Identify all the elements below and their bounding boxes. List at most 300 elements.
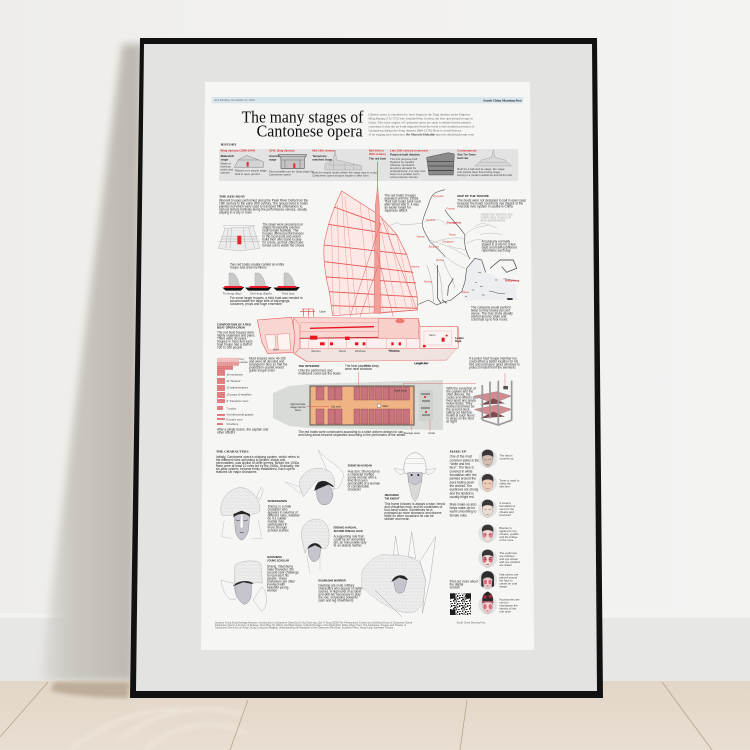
era: purpose-built theatres: theatres by wealthy	[390, 160, 415, 164]
make-up captions: The eyebrows	[499, 551, 518, 555]
make-up captions: shape	[499, 585, 507, 589]
era: makeshift stage: poles and	[221, 168, 233, 172]
xiaosheng label: characters are often	[267, 579, 295, 583]
newspaper page	[201, 82, 534, 650]
interior labels and leader lines: Approximate	[290, 402, 306, 406]
make-up captions: A creamy	[499, 501, 512, 505]
illustration: bamboo stage	[218, 226, 260, 251]
panel: header and title	[212, 97, 523, 141]
captain text: lived apart any space	[446, 398, 476, 402]
map: place names: Zhuhai	[436, 259, 444, 262]
wu sheng label: Sheng, is a male	[268, 504, 291, 508]
character: yanmei	[301, 519, 329, 573]
map note: where they troupes of	[481, 216, 511, 220]
yanmei label: girl, an honourable lady	[334, 540, 367, 544]
make-up text: and the lipstick is	[450, 491, 474, 495]
make-up captions: placed around	[499, 576, 518, 580]
era: purpose-built theatres: lower to a smaller set in	[390, 172, 420, 176]
sources footer	[215, 621, 486, 630]
xiaosheng label: Sheng, Xiaosheng	[267, 564, 293, 568]
captain text: the second deck,	[446, 407, 470, 411]
stage description: near temple festivals. The	[262, 229, 299, 233]
characters intro: features six major characters	[216, 470, 257, 474]
era: purpose-built theatres: Purpose-built theatres	[390, 153, 420, 157]
interior labels and leader lines: stage can be	[290, 405, 306, 409]
red boat intro: painted red which were used to transport the entertainers to	[219, 204, 303, 208]
panel: the red boat	[218, 194, 308, 306]
label: huadan role	[348, 465, 380, 492]
laosheng label: four-tonal voices. Sometimes he is	[384, 508, 433, 512]
make-up captions: and the bridge	[499, 535, 518, 539]
yanmei label: A supporting role that	[334, 534, 364, 538]
make-up step 1	[478, 449, 497, 468]
crew note: guide troupe order	[249, 368, 275, 372]
crew footnote	[217, 428, 268, 435]
make-up captions: skin firm	[499, 484, 510, 488]
map: place names: Sanshui	[426, 219, 435, 222]
map: place names: Taishan	[424, 280, 433, 283]
make-up captions: Blusher is	[499, 526, 512, 530]
map: place names: Macau	[462, 291, 470, 294]
red boat intro: Itinerant troupes performed along the Pearl River Delta from the	[219, 198, 308, 202]
history band	[219, 149, 518, 181]
map description: because the boats could only use stages of the	[457, 202, 523, 206]
mat board	[136, 44, 597, 691]
era: purpose-built theatres: entertainment. It is now cost-	[390, 169, 426, 173]
chart: crew legend: 10 musicians	[226, 372, 243, 376]
intro text: of its staging and characters. By Marcelo Duhalde marcelo.duhalde@scmp.com	[368, 133, 474, 137]
make-up captions: covered up	[499, 456, 514, 460]
captain text: to sleep on the floor	[446, 416, 474, 420]
make-up step 4	[478, 524, 497, 543]
red boat heading: THE RED BOAT	[219, 194, 246, 198]
boat operation text: Their last boats sank soon	[384, 199, 421, 203]
history heading: HISTORY	[221, 143, 237, 147]
characters intro: there were at least 10 roles led by the 1960s. Gradually, the	[216, 464, 300, 468]
stage description: for a time, as their cities have	[262, 241, 304, 245]
era: purpose-built theatres: Chinese merchants	[390, 163, 415, 167]
company text: A company normally	[482, 239, 510, 243]
QR code	[450, 593, 471, 615]
boat operation text: operated until the 1950s.	[384, 196, 419, 200]
stage description: troupes offered performances	[262, 232, 304, 236]
wu sheng label: more stronger	[268, 525, 287, 529]
bunk text: If a junior 'bad' troupe member too	[469, 356, 517, 360]
interior heading and text: Only the performers and	[298, 368, 333, 372]
make-up captions	[499, 453, 521, 614]
composition heading: BOAT OPERA CREW	[217, 325, 245, 329]
captain text: at night	[446, 419, 457, 423]
mast and rigging	[350, 186, 418, 317]
make-up text: face". The face is	[450, 466, 474, 470]
floor plan	[310, 386, 414, 425]
make-up captions: emphasise the	[499, 604, 518, 608]
wusheng martial label: scenes. A high level of acrobat	[318, 590, 361, 594]
make-up captions: forehead	[499, 513, 511, 517]
wusheng martial label: and skill are necessary to play	[318, 593, 361, 597]
bunk text: could afford a better location for his	[469, 359, 519, 363]
crew note	[249, 356, 288, 372]
intro text: Guangdong during the Song dynasty (960-1279). Here is a brief history	[368, 128, 462, 132]
character: hua dan	[285, 450, 343, 505]
make-up captions: and eye shadow	[499, 560, 521, 564]
xiaosheng label: second-rank challenge	[267, 570, 299, 574]
laosheng label	[384, 494, 446, 521]
laosheng label: sinister and mean	[384, 517, 409, 521]
text: company performance: The company would perform	[471, 305, 511, 309]
digital version note: the digital	[450, 582, 463, 586]
era: the red boat: 20th century	[369, 152, 386, 156]
boat: first: Tin Hong (Sky)	[223, 291, 241, 295]
characters intro: six-pillar system, became firmly established. Each opera	[216, 467, 295, 471]
bunk text: protect himself from the elements	[469, 365, 516, 369]
sources footer: Sources: Hong Kong Heritage Museum; Introduction to Cantonese Opera by Dr. Ng Chun-yau; Qiu Yi-Tong (2009) The Performance Context as a Defining Force of Cantonese Opera	[215, 621, 413, 624]
boat operation text: The red boats' troupes	[384, 193, 416, 197]
text: company performance: twice to nine shows per port	[471, 309, 510, 313]
make-up heading: MAKE-UP	[450, 449, 467, 453]
boat operation text: after World War II. It was	[384, 202, 419, 206]
make-up captions: are redrawn	[499, 554, 515, 558]
character: bearded laosheng	[394, 453, 436, 502]
xiaosheng label: XIAOSHENG	[267, 556, 282, 559]
wusheng martial label: the role, employing powerful	[318, 596, 358, 600]
laosheng label: JINGSHENG	[384, 494, 399, 497]
map note: their performance	[481, 219, 506, 223]
captain text: chief director, the	[446, 392, 471, 396]
sources footer: South China Morning Post	[457, 621, 486, 624]
interior heading and text	[298, 364, 379, 387]
interior heading and text: musicians could use the boats	[298, 371, 341, 375]
text: company performance	[471, 305, 513, 322]
illustration: bunk beds	[474, 381, 512, 425]
bunk text	[469, 356, 520, 369]
map: place names: Foshan	[447, 207, 456, 210]
make-up text: female roles	[450, 513, 467, 517]
chart: crew dot grid	[217, 358, 239, 425]
map: place names: Guangzhou	[447, 221, 462, 225]
map description: The boats were not designed to sail in open seas	[457, 199, 526, 203]
map: place names: Nanhai	[417, 235, 425, 238]
hull	[293, 318, 459, 362]
map note	[481, 213, 513, 223]
make-up step 5	[478, 549, 497, 568]
chart: crew legend: 3 barbers	[226, 422, 239, 426]
map: place names	[411, 195, 520, 300]
map note: Hangzhou was the site	[481, 213, 513, 217]
boat labels: Room	[339, 349, 347, 353]
map: place names: Panyu	[449, 233, 457, 236]
captain text: the captain and the	[446, 389, 473, 393]
make-up captions: Toner is used to	[499, 478, 520, 482]
stage description: build their own stand to play	[262, 238, 302, 242]
xiaosheng label: beautiful young	[267, 585, 289, 589]
make-up text: One of the most	[450, 455, 472, 459]
company text: days and having different	[482, 245, 517, 249]
red beams and cargo	[300, 327, 448, 347]
xiaosheng label: to represent his	[267, 573, 289, 577]
panel: composition of a red boat crew	[217, 323, 288, 435]
interior right labels: Bunk beds	[394, 389, 408, 393]
make-up text: foundation with red	[450, 473, 477, 477]
yanmei label	[334, 527, 367, 547]
captain text: bunks at each floors	[446, 413, 475, 417]
masthead bar: A12 Monday, November 11, 2019	[214, 98, 255, 103]
red boat intro: various temple festivals along the performance venues, usually	[219, 207, 307, 211]
cook area	[419, 390, 433, 421]
third boat text: For some larger troupes, a third boat was needed to	[230, 296, 303, 300]
intro text: Chinese opera is considered to have begun in the Tang dynasty under Emperor	[368, 112, 471, 116]
era: ancestral stage: Ancestral	[269, 154, 282, 158]
chart: crew legend	[226, 357, 254, 426]
label: huadan role: Hua dan: Sheng dan is	[348, 470, 380, 474]
era: makeshift stage: Ming dynasty (1368-1644)	[221, 149, 255, 153]
red boat intro: staying in a city or town	[219, 210, 252, 214]
wusheng martial label: DAOMADAN WARRIOR	[318, 579, 346, 582]
chart: crew legend: 22 "flowers"	[226, 379, 241, 383]
boat labels	[273, 309, 436, 366]
wu sheng label: martial man,	[268, 519, 285, 523]
era: matshed stage: Built for temple rituals where the stage was in a city,	[312, 170, 377, 174]
wusheng martial label: characters who appear in battle	[318, 587, 363, 591]
era: sha tin town hall: facing in a modern audience and all the hall	[457, 173, 512, 177]
interior heading and text: were near windows	[345, 367, 372, 371]
laosheng label: and chivalrous man, and its constitutes of	[384, 505, 442, 509]
era: sha tin town hall: and stands have fixed rising stage	[457, 170, 500, 174]
interior labels and leader lines: Cat men	[331, 404, 342, 408]
era: sha tin town hall: Sha Tin Town	[457, 153, 476, 157]
baseboard	[0, 613, 750, 681]
boat labels: Length line	[414, 362, 428, 366]
crew note: production quartet would	[249, 365, 284, 369]
map description: riverside river system in southern China	[457, 205, 513, 209]
panel: the interior	[273, 336, 520, 437]
yanmei label: ERBANG HUADAN,	[334, 527, 357, 530]
stage description: turned out to watch the shows	[262, 244, 305, 248]
laosheng label: portrayed as more shamanic and sincere	[384, 511, 442, 515]
crew note: and were all devoted and	[249, 359, 285, 363]
make-up step 2	[478, 473, 497, 492]
captain text: below decks. They	[446, 401, 473, 405]
era: makeshift stage	[221, 149, 267, 176]
make-up captions: The hair is	[499, 453, 513, 457]
make-up captions: of the nose	[499, 538, 514, 542]
sources footer: Cantonese Opera: A Century of Change, Choi Ming-Yip (2014), Red Boat Opera: Cultural Heritage of the Pearl River Delta, Wong Yuen, The Cantonese Troupes and Theatre of	[215, 624, 406, 627]
stage description	[262, 223, 305, 248]
two boats text	[230, 262, 284, 269]
bunks	[316, 387, 410, 424]
xiaosheng label: women	[267, 588, 277, 592]
composition text: boat troupe had a staff of	[217, 343, 252, 347]
make-up captions: make the	[499, 481, 511, 485]
wusheng martial label	[318, 579, 363, 603]
xiaosheng label: involved with	[267, 582, 285, 586]
interior labels and leader lines	[290, 402, 406, 437]
boat labels: Women	[311, 349, 321, 353]
cabin and deckhouses	[300, 309, 458, 348]
make-up text: the cheeks. The	[450, 484, 472, 488]
label: huadan role: of considerable	[348, 485, 369, 489]
era: purpose-built theatres: around a demand for	[390, 166, 416, 170]
make-up text: usually bright red	[450, 495, 474, 499]
wu sheng label: WUSHENG/MAN	[268, 500, 287, 503]
era: makeshift stage: Makeshift	[221, 154, 234, 158]
crew note: arranged in tiers so that the	[249, 362, 288, 366]
crew footnote: After a single dozen, the captain and	[217, 428, 268, 432]
map: coastline and islands	[418, 258, 517, 305]
composition heading	[217, 323, 251, 329]
composition heading: COMPOSITION OF A RED	[217, 323, 251, 327]
characters intro: the different roles according to gender, status and	[216, 458, 285, 462]
make-up captions: Accessories are	[499, 598, 520, 602]
xiaosheng label: male character, the	[267, 567, 294, 571]
label: huadan role: a character trained	[348, 473, 374, 477]
interior labels and leader lines: and living areas became separated according to the performers of the artists.	[298, 433, 406, 437]
interior labels and leader lines: fixed	[295, 408, 301, 412]
boat labels: Windows	[389, 349, 401, 353]
era: matshed stage: Temporary	[312, 154, 327, 158]
map: place names: Jiangmen	[428, 245, 440, 248]
character: wu sheng	[221, 487, 263, 540]
bunk text: bed and enclosure gives windows to	[469, 362, 520, 366]
interior right labels: Windows	[388, 349, 400, 353]
era: ancestral stage: 1640, Qing dynasty	[269, 149, 295, 153]
third boat text: costumes, props and huge ensemble	[230, 302, 282, 306]
panel: history timeline	[219, 143, 518, 192]
title: The many stages of	[242, 108, 364, 127]
laosheng label: THE KNIGHT	[384, 497, 400, 500]
wusheng martial label: sash and leg movements	[318, 599, 354, 603]
wu sheng label: different roles, whether	[268, 513, 300, 517]
boat operation text: an easier target for	[384, 205, 411, 209]
red boat intro: 19th century to the early 20th century. The groups lived in boats	[219, 201, 308, 205]
era: matshed stage: Mid-19th century	[312, 149, 335, 153]
intro text: Ming Huang (712-755) who founded Pear Garden, the first operational troupe in	[368, 116, 473, 121]
interior right labels: Storage area	[403, 431, 420, 435]
boat labels: Bow	[273, 348, 279, 352]
picture frame	[130, 38, 603, 698]
label: huadan role: character	[348, 488, 361, 492]
boat: third: Third boat	[282, 291, 295, 295]
map: place names: Qingyuan	[433, 195, 445, 198]
composition text: troupes in most and each	[217, 340, 253, 344]
make-up text: painted around the	[450, 477, 476, 481]
era: sha tin town hall: Hall site	[457, 156, 469, 160]
boat labels: Stern	[429, 333, 436, 337]
make-up captions: cheeks, eyelids	[499, 532, 519, 536]
stage description: stages temporarily erected	[262, 226, 300, 230]
wusheng martial label: Daofang are male military	[318, 584, 355, 588]
laosheng label: while on other occasions he can be	[384, 514, 434, 518]
make-up captions: used on the	[499, 507, 515, 511]
era: makeshift stage: built in open ground	[235, 172, 260, 176]
era: purpose-built theatres	[390, 149, 454, 179]
interior heading and text: The best places to sleep	[345, 364, 379, 368]
chart: crew legend: 13 administrators	[226, 386, 249, 390]
make-up captions: cheeks and	[499, 510, 514, 514]
wu sheng label	[268, 500, 300, 532]
sources footer: Cantonese Opera by Lai-Tung Chung; Living and Staging; Understanding the Hardware of the Cantonese Red Boat, Southern Press, Hong Kong; Sunbeam Theatre	[215, 627, 394, 630]
label: huadan role: ZHENGYIN HUADAN	[348, 465, 372, 468]
stern house	[257, 317, 300, 353]
panel: bearded and warrior characters	[362, 449, 521, 617]
third boat text: accommodate the large sets of belongings,	[230, 299, 290, 303]
map heading: MAP OF THE TROUPE	[457, 194, 489, 198]
make-up captions: used to	[499, 601, 509, 605]
laosheng label: This frame (shown) is always a wise, heroic	[384, 502, 446, 506]
character: xiaosheng	[221, 561, 267, 612]
composition text: There were 30 opera	[217, 337, 247, 341]
era: makeshift stage: Raised on a simple stage	[235, 169, 267, 173]
map: sea	[462, 258, 517, 300]
crew note: Most troupes were 40-150	[249, 356, 286, 360]
make-up captions: identity of the	[499, 607, 517, 611]
boat: second: Dei Hong (Earth)	[250, 291, 272, 295]
wu sheng label: participated in	[268, 522, 288, 526]
boat labels: Windows	[355, 349, 366, 353]
chart: crew legend: 6 boat's men	[226, 417, 243, 421]
digital version note: version	[450, 585, 460, 589]
interior right labels: Length line	[414, 361, 429, 365]
make-up captions: the face to	[499, 579, 513, 583]
captain text: With the exception of	[446, 386, 476, 390]
era: the red boat: Mid-19th to	[369, 149, 384, 153]
chart: crew legend: 7 cooks	[226, 406, 237, 410]
frame shadow on wall	[40, 44, 142, 681]
composition text: The red boat troupes were	[217, 331, 254, 335]
map description	[457, 199, 526, 209]
era: purpose-built theatres: a few purpose venues	[390, 175, 418, 179]
interior right labels: Deck	[455, 339, 462, 343]
interior right labels: Cook	[428, 431, 436, 435]
era: purpose-built theatres: Late 19th century to present	[390, 149, 428, 153]
two boats text: Two red boats usually carried an entire	[230, 262, 284, 266]
map: place names: Hong Kong	[505, 279, 520, 283]
make-up text: warm smoothing to	[450, 510, 477, 514]
make-up text: helps make-up for	[450, 506, 475, 510]
text: company performance: venue. The river show usually	[471, 312, 513, 316]
text: company performance: could last up to four hours	[471, 318, 508, 322]
deck hull outline	[273, 380, 443, 430]
interior heading and text: THE INTERIOR	[298, 364, 320, 368]
era: makeshift stage: stage	[221, 157, 228, 161]
make-up step 6	[478, 571, 497, 589]
illustration: red junk boat	[257, 186, 459, 366]
characters intro: personalities, was similar to other genres. Before the 1930s,	[216, 461, 300, 465]
interior right labels: Ladder	[455, 336, 464, 340]
era: ancestral stage: Cantonese opera	[269, 173, 291, 177]
chart: crew legend: Key	[239, 357, 245, 361]
make-up text: common styles is the	[450, 458, 479, 462]
composition text: 100 to 160 people	[217, 346, 243, 350]
captain text	[446, 386, 479, 423]
label: huadan role: personality of a woman	[348, 482, 380, 486]
era: matshed stage: Cantonese opera troupes began to take form	[312, 173, 369, 177]
make-up text: eyes fading down	[450, 480, 474, 484]
characters intro: Initially, Cantonese opera's shiqiang system, which refers to	[216, 455, 300, 459]
era: ancestral stage	[269, 149, 314, 177]
third boat text	[230, 296, 303, 306]
yanmei label: could be an unmarried	[334, 537, 365, 541]
label: huadan role: kind and open	[348, 479, 368, 483]
era: makeshift stage: bamboo	[221, 165, 231, 169]
interior right labels: Wing	[364, 364, 371, 368]
characters heading: THE CHARACTERS	[216, 449, 249, 453]
wu sheng label: appears in swarms of	[268, 510, 298, 514]
era: makeshift stage: canvas	[221, 171, 230, 175]
make-up step 3	[478, 499, 497, 518]
captain text: worked and lived on	[446, 404, 475, 408]
interior labels and leader lines: The red boats were constructed according to a strict uniform design for use	[298, 430, 403, 434]
